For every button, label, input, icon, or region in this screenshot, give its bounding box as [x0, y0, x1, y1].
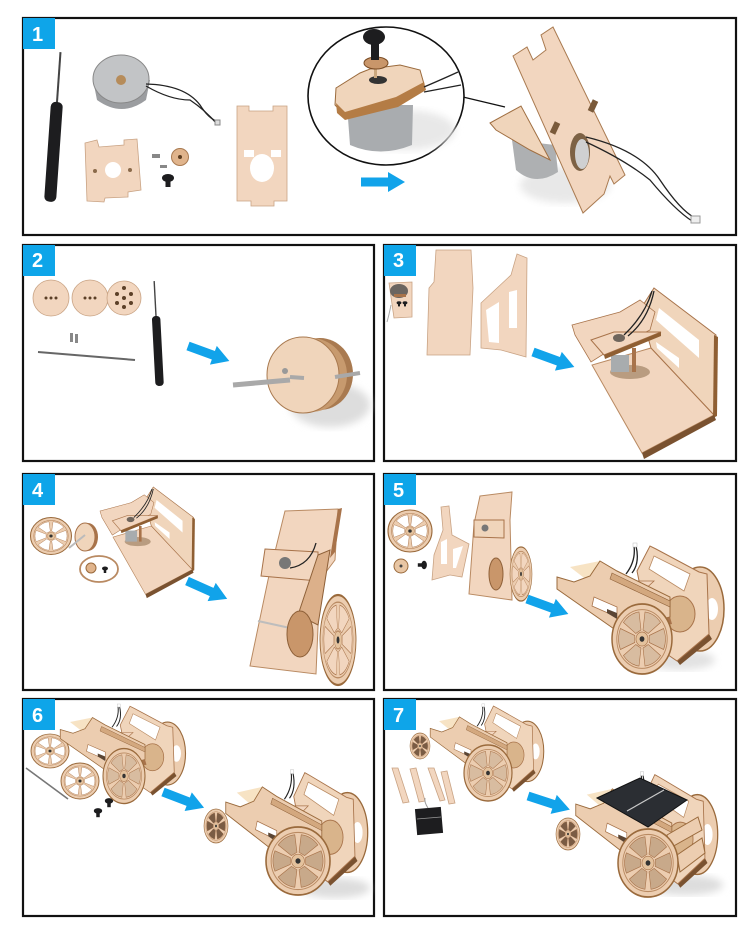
assembled tall plate with wheel — [250, 508, 356, 685]
panel 1: motor mount assembly — [23, 18, 736, 235]
assembled wheel on axle — [233, 337, 370, 427]
car body with front wheel — [410, 704, 544, 801]
assembled frame — [572, 288, 718, 459]
arrow — [159, 783, 208, 817]
panel 5: side plate and car body — [384, 474, 736, 690]
screws and axle rod — [38, 333, 135, 360]
two small wheels — [31, 734, 99, 799]
wheel part — [30, 518, 72, 554]
icon: screwdriver — [150, 281, 164, 386]
callout circle: motor detail — [308, 27, 505, 165]
badge 1 — [23, 18, 55, 49]
icon: screwdriver — [44, 52, 66, 202]
badge 1: 1 — [32, 24, 43, 46]
panel 6: rear wheel attachment — [23, 699, 374, 916]
finished solar car — [556, 772, 723, 897]
badge 2: 2 — [32, 250, 43, 272]
motor part — [387, 282, 412, 322]
panel 2: wheel axle assembly — [23, 245, 374, 461]
wheel part — [388, 510, 432, 552]
three wooden discs — [33, 280, 141, 316]
panel 7: solar panel attachment — [384, 699, 736, 916]
panel 4: attach wheel — [23, 474, 374, 690]
wood motor plate — [237, 106, 287, 206]
axle disc part — [69, 523, 98, 551]
badge 4: 4 — [32, 480, 44, 502]
badge 3: 3 — [393, 250, 404, 272]
screws, disc and bolt — [152, 148, 188, 187]
badge 7: 7 — [393, 705, 404, 727]
assembled car body — [557, 543, 724, 674]
rod and bolts — [26, 768, 113, 817]
side plate part — [432, 506, 469, 580]
panel 3: frame assembly — [384, 245, 736, 461]
disc and bolt — [394, 559, 427, 573]
arrow — [525, 786, 573, 819]
circled parts — [80, 556, 118, 582]
badge 2 — [23, 245, 55, 276]
partially built frame — [469, 492, 532, 601]
badge 4 — [23, 474, 55, 505]
badge 5 — [384, 474, 416, 505]
arrow — [524, 590, 572, 623]
assembled car — [204, 770, 370, 898]
four wood strips — [392, 768, 455, 804]
solar panel part — [415, 798, 443, 835]
arrow — [185, 337, 233, 370]
icon: motor with wires — [93, 55, 220, 125]
long base plate — [427, 250, 473, 355]
badge 5: 5 — [393, 480, 404, 502]
small assembled frame — [100, 487, 195, 598]
arrow — [530, 343, 578, 376]
badge 3 — [384, 245, 416, 276]
arrow — [183, 572, 231, 608]
assembled motor plate with wires — [490, 27, 700, 223]
wood bracket plate — [85, 139, 141, 202]
triangular side plate — [481, 254, 527, 357]
arrow — [361, 172, 405, 192]
badge 6 — [23, 699, 55, 730]
badge 7 — [384, 699, 416, 730]
car body without front wheel — [60, 704, 186, 804]
badge 6: 6 — [32, 705, 43, 727]
